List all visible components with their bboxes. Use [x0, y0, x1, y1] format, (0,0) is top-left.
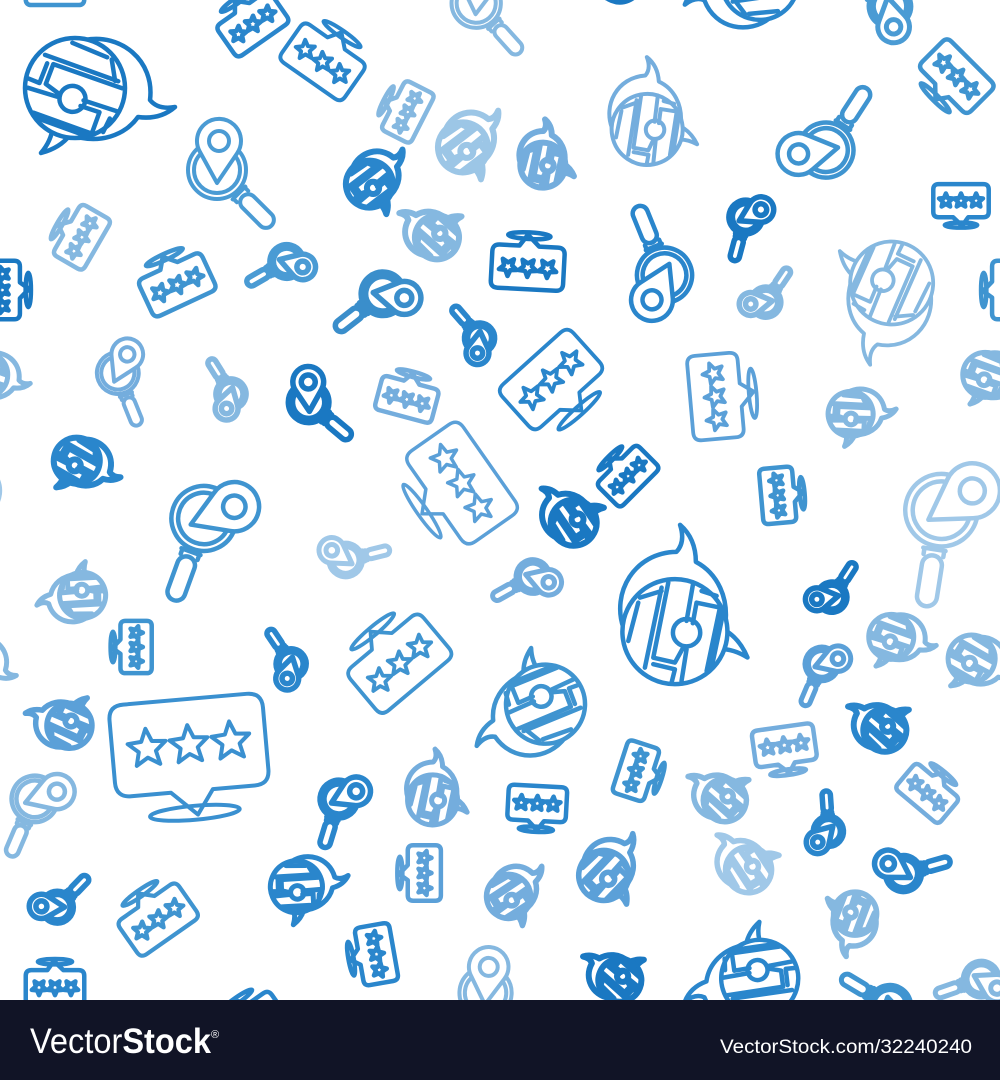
icon: location magnifier [782, 637, 863, 710]
icon: location magnifier [243, 236, 320, 303]
icon: chat bubble map [572, 0, 652, 9]
icon: chat bubble map [0, 352, 30, 404]
icon: chat bubble map [941, 631, 1000, 697]
footer bar [0, 1000, 1000, 1080]
icon: star rating sign [751, 723, 819, 779]
icon: location magnifier [295, 767, 387, 853]
icon: chat bubble map [668, 0, 815, 52]
icon: star rating sign [490, 231, 566, 291]
icon: location magnifier [837, 958, 919, 1053]
icon: chat bubble map [514, 116, 575, 193]
icon: chat bubble map [0, 631, 22, 697]
icon: location magnifier [449, 0, 530, 58]
icon: location magnifier [312, 514, 395, 593]
icon: star rating sign [278, 9, 376, 103]
registered mark: ® [211, 1029, 219, 1041]
icon: chat bubble map [677, 758, 757, 829]
icon: chat bubble map [23, 693, 96, 751]
icon: location magnifier [867, 825, 955, 908]
icon: chat bubble map [961, 352, 1000, 404]
icon: star rating sign [26, 0, 84, 5]
icon: chat bubble map [476, 848, 558, 933]
icon: star rating sign [588, 436, 660, 508]
icon: location magnifier [0, 762, 91, 863]
icon: star rating sign [108, 870, 200, 958]
icon: location magnifier [706, 188, 789, 266]
icon: star rating sign [208, 0, 290, 59]
footer logo: VectorStock [30, 1022, 211, 1061]
icon: star rating sign [507, 784, 567, 833]
icon: chat bubble map [523, 471, 612, 556]
icon: chat bubble map [598, 51, 700, 174]
icon: location magnifier [81, 331, 173, 431]
icon: chat bubble map [867, 614, 936, 666]
icon: star rating sign [908, 37, 996, 125]
icon: location magnifier [766, 81, 889, 187]
icon: location magnifier [930, 946, 1000, 1027]
icon: chat bubble map [452, 637, 604, 787]
icon: star rating sign [111, 621, 152, 673]
icon: star rating sign [132, 240, 217, 318]
icon: location magnifier [0, 443, 38, 617]
icon: star rating sign [894, 754, 967, 825]
icon: location magnifier [837, 0, 919, 53]
icon: chat bubble map [260, 842, 357, 929]
icon: star rating sign [687, 351, 760, 441]
icon: star rating sign [933, 184, 989, 228]
icon: location magnifier [446, 304, 497, 366]
icon: star rating sign [496, 326, 618, 446]
icon: chat bubble map [388, 194, 470, 267]
icon: star rating sign [0, 261, 31, 319]
icon: star rating sign [333, 597, 455, 716]
icon: location magnifier [457, 946, 543, 1051]
icon: location magnifier [489, 550, 566, 619]
icon: star rating sign [397, 845, 441, 901]
icon: chat bubble map [826, 890, 877, 957]
icon: location magnifier [285, 363, 355, 447]
icon: location magnifier [858, 443, 1000, 617]
icon: chat bubble map [698, 818, 787, 903]
icon: star rating sign [26, 959, 84, 1005]
icon: location magnifier [592, 198, 713, 331]
icon: location magnifier [799, 559, 866, 617]
icon: location magnifier [194, 356, 253, 423]
icon: chat bubble map [401, 746, 469, 830]
icon: star rating sign [981, 261, 1000, 319]
icon: star rating sign [108, 693, 272, 826]
icon: location magnifier [29, 873, 92, 924]
icon: star rating sign [43, 198, 112, 271]
icon: star rating sign [371, 75, 435, 144]
icon: chat bubble map [569, 819, 654, 914]
icon: location magnifier [255, 626, 312, 693]
icon: chat bubble map [29, 558, 115, 635]
icon: chat bubble map [572, 938, 652, 1009]
icon: location magnifier [331, 267, 424, 344]
icon: star rating sign [343, 922, 399, 988]
icon: chat bubble map [668, 914, 815, 1049]
icon: chat bubble map [832, 234, 937, 369]
icon: star rating sign [612, 739, 670, 805]
icon: chat bubble map [820, 379, 902, 449]
icon: location magnifier [734, 265, 800, 322]
icon: chat bubble map [20, 37, 175, 153]
icon: chat bubble map [335, 132, 421, 222]
icon: chat bubble map [427, 92, 517, 188]
icon: star rating sign [374, 364, 442, 424]
icon: chat bubble map [608, 518, 750, 696]
icon: star rating sign [759, 465, 807, 524]
icon: star rating sign [208, 980, 290, 1059]
footer image id: VectorStock.com/32240240 [720, 1036, 972, 1058]
icon: location magnifier [188, 119, 278, 232]
icon: location magnifier [787, 786, 861, 861]
icon: location magnifier [127, 465, 285, 610]
icon: chat bubble map [47, 433, 126, 498]
icon: chat bubble map [837, 688, 917, 759]
icon: star rating sign [386, 419, 521, 559]
